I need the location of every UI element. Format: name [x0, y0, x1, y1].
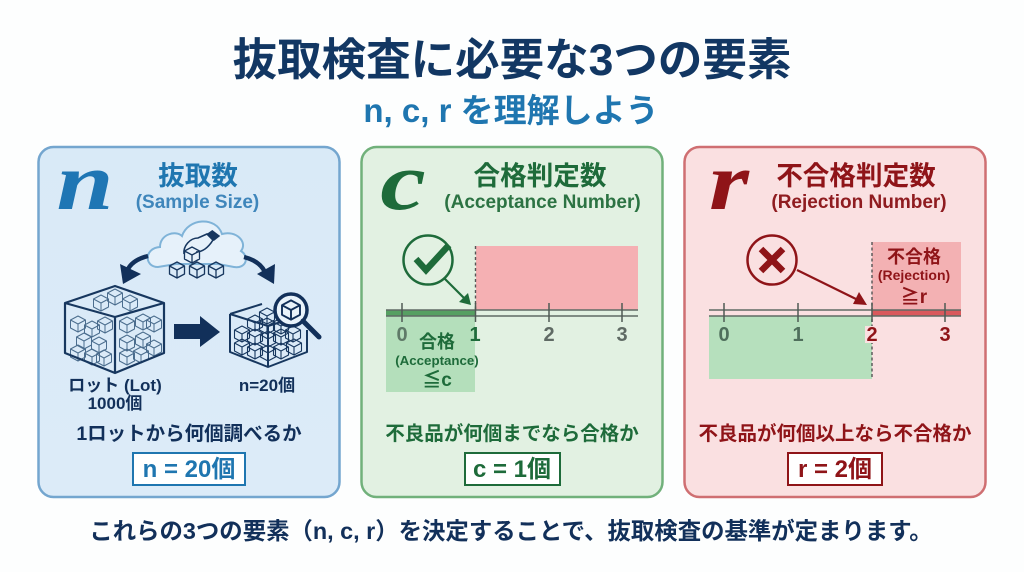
axis labels: 1 [792, 324, 804, 346]
number line chart: r [709, 242, 961, 379]
heading: sample size: (Sample Size) [136, 192, 259, 213]
label: rejection: ≧r [901, 286, 928, 308]
arrow: cloud to sample [244, 257, 275, 284]
icon: check mark circle [404, 236, 452, 284]
rejection zone [872, 242, 961, 310]
panel: n sample size [38, 137, 340, 497]
label: rejection: (Rejection) [878, 267, 950, 283]
question text: r: 不良品が何個以上なら不合格か [698, 422, 972, 445]
label: lot: ロット (Lot) [68, 376, 162, 395]
arrow: cross to 2 [797, 270, 867, 305]
icon: cross circle [748, 236, 796, 284]
heading: acceptance number: (Acceptance Number) [444, 192, 641, 213]
icon: lot box with many cubes [65, 286, 164, 373]
axis labels: 2 [866, 324, 878, 346]
arrow: lot to sample [174, 316, 220, 347]
label: lot: 1000個 [88, 394, 142, 413]
letter r: r [709, 137, 750, 228]
panel background: n [38, 147, 340, 497]
axis labels: 3 [616, 324, 628, 346]
label: acceptance [395, 332, 479, 391]
heading: rejection number: 不合格判定数 [776, 161, 936, 191]
question text: n: 1ロットから何個調べるか [76, 423, 302, 445]
letter n: n [57, 137, 113, 228]
heading: acceptance number [444, 161, 641, 213]
value box: r [788, 453, 882, 485]
axis labels: 2 [543, 324, 555, 346]
panel background: c [362, 147, 662, 497]
axis labels: 0 [396, 324, 408, 346]
panel background: r [684, 147, 986, 497]
axis labels [718, 324, 951, 346]
label: acceptance: 合格 [419, 332, 455, 352]
label: lot [68, 376, 162, 413]
heading: acceptance number: 合格判定数 [474, 161, 607, 191]
value box: c: c = 1個 [473, 456, 551, 483]
value box: n [133, 453, 245, 485]
label: n=20: n=20個 [239, 376, 295, 395]
axis labels: 1 [469, 324, 481, 346]
panel: c acceptance number [362, 137, 662, 497]
heading: sample size: 抜取数 [158, 161, 238, 191]
subtitle: n, c, r を理解しよう [363, 92, 659, 129]
panel: r rejection number [684, 137, 986, 497]
heading: rejection number: (Rejection Number) [771, 192, 947, 213]
icon: sample box with magnifier [230, 294, 319, 367]
label: acceptance: (Acceptance) [395, 353, 479, 368]
value box: c [465, 453, 560, 485]
number line chart: c [386, 246, 638, 392]
question text: c: 不良品が何個までなら合格か [385, 422, 639, 445]
acceptance zone [386, 316, 475, 392]
label: rejection: 不合格 [887, 247, 941, 267]
label: rejection [878, 247, 950, 308]
footer statement: これらの3つの要素（n, c, r）を決定することで、抜取検査の基準が定まります。 [89, 517, 933, 544]
axis labels: 0 [718, 324, 730, 346]
value box: n: n = 20個 [143, 456, 235, 483]
axis labels [396, 324, 628, 346]
rejection zone [476, 246, 638, 310]
arrow: cloud to lot [120, 256, 148, 284]
axis labels: 3 [939, 324, 951, 346]
heading: sample size [136, 161, 259, 213]
label: acceptance: ≦c [422, 369, 452, 391]
title: 抜取検査に必要な3つの要素 [233, 36, 791, 85]
letter c: c [380, 137, 426, 228]
value box: r: r = 2個 [798, 456, 872, 483]
icon: cloud with hand picking cubes [148, 221, 246, 278]
arrow: check to 1 [445, 279, 471, 305]
heading: rejection number [771, 161, 947, 213]
acceptance zone [709, 316, 872, 379]
